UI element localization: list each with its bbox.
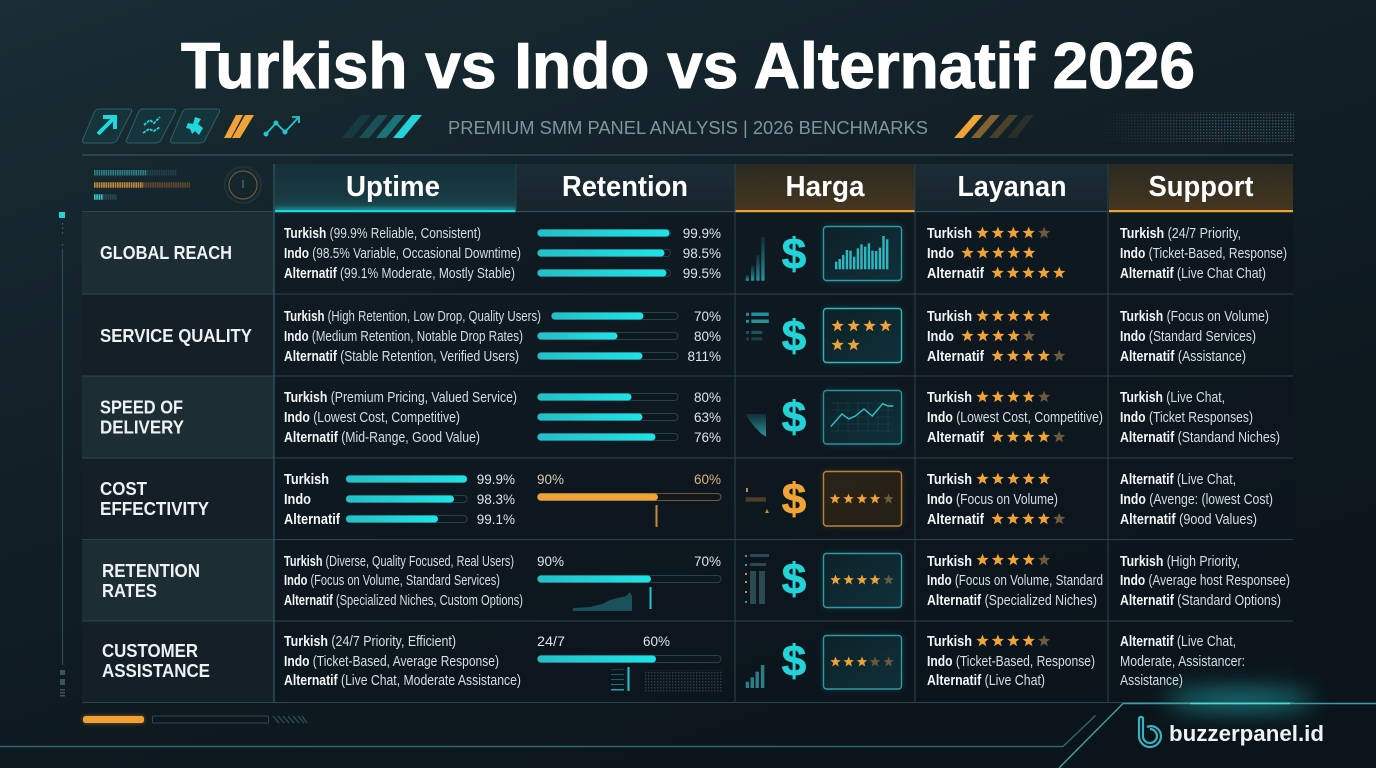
layanan ratings: Turkish [927, 226, 972, 242]
icon: orange slashes [954, 115, 1034, 138]
header: Support: Support [1148, 171, 1254, 203]
layanan ratings: Indo (Focus on Volume, Standard [927, 573, 1103, 589]
bottom status bars [83, 716, 307, 723]
uptime labels and bars: Alternatif [284, 512, 340, 528]
outlined track [152, 716, 268, 723]
row label line 2: RATES [102, 581, 157, 601]
layanan ratings: Indo (Ticket-Based, Response) [927, 654, 1095, 670]
row label: CUSTOMER [102, 641, 198, 661]
uptime text: Alternatif (Mid-Range, Good Value) [284, 430, 480, 446]
retention bars [538, 390, 721, 445]
uptime text: Turkish (Premium Pricing, Valued Service) [284, 390, 517, 406]
harga: icons and bar chart panel: $ [782, 230, 806, 279]
retention orange bar: 60% [694, 472, 721, 487]
uptime text: Indo (Ticket-Based, Average Response) [284, 654, 499, 670]
support text: Turkish (Live Chat, [1120, 390, 1225, 406]
status bars [94, 173, 190, 197]
layanan ratings: Alternatif [927, 349, 984, 365]
icon: arrow badge [82, 109, 132, 143]
support text: Alternatif (Standard Options) [1120, 593, 1281, 609]
support text: Turkish (Focus on Volume) [1120, 309, 1269, 325]
uptime text [284, 554, 523, 609]
uptime text: Turkish (24/7 Priority, Efficient) [284, 634, 456, 650]
retention bars: 99.9% [683, 226, 721, 241]
header: Layanan: Layanan [958, 171, 1066, 203]
support text: Alternatif (Live Chat, [1120, 634, 1236, 650]
uptime labels and bars [284, 472, 515, 528]
retention bar with dot matrix: 24/7 [537, 634, 565, 649]
header: Uptime: Uptime [346, 171, 440, 203]
retention bar with dot matrix [537, 634, 722, 692]
uptime text: Alternatif (Live Chat, Moderate Assistance) [284, 673, 521, 689]
row label: SPEED OF [100, 398, 183, 418]
uptime text: Turkish (High Retention, Low Drop, Quality Users) [284, 309, 541, 325]
layanan ratings: Turkish [927, 390, 972, 406]
icon row: top left icons [82, 109, 422, 143]
harga: icons and orange star panel [746, 472, 902, 526]
retention bar with mini chart: 70% [694, 554, 721, 569]
uptime text: Alternatif (99.1% Moderate, Mostly Stable) [284, 266, 515, 282]
row label line 2: ASSISTANCE [102, 661, 210, 681]
support text: Assistance) [1120, 673, 1183, 689]
harga: icons and line chart panel [745, 390, 902, 444]
uptime text: Alternatif (Specialized Niches, Custom Options) [284, 593, 523, 609]
row label: SERVICE QUALITY [100, 326, 252, 346]
support text: Turkish (24/7 Priority, [1120, 226, 1241, 242]
retention bars [538, 309, 721, 364]
row label: RETENTION [102, 561, 200, 581]
header: Layanan [916, 164, 1108, 212]
subtitle: PREMIUM SMM PANEL ANALYSIS | 2026 BENCHMARKS [448, 118, 928, 138]
retention bar with mini chart [537, 554, 721, 611]
title: Turkish vs Indo vs Alternatif 2026 [181, 29, 1195, 102]
layanan ratings: Indo (Focus on Volume) [927, 492, 1058, 508]
uptime text: Turkish (Diverse, Quality Focused, Real Users) [284, 554, 514, 570]
layanan ratings [927, 309, 1065, 365]
uptime labels and bars: 99.1% [477, 512, 515, 527]
layanan ratings: Turkish [927, 309, 972, 325]
retention orange bar: 90% [537, 472, 564, 487]
layanan ratings: Indo (Lowest Cost, Competitive) [927, 410, 1103, 426]
uptime text [284, 226, 521, 282]
retention bars: 811% [687, 349, 721, 364]
header: Uptime [275, 164, 516, 213]
retention bars: 70% [694, 309, 721, 324]
layanan ratings: Alternatif (Specialized Niches) [927, 593, 1097, 609]
row 2: Service Quality [100, 308, 1269, 365]
support text: Indo (Ticket Responses) [1120, 410, 1253, 426]
layanan ratings: Alternatif [927, 512, 984, 528]
harga: icons and orange star panel: $ [782, 475, 806, 524]
uptime labels and bars: 99.9% [477, 472, 515, 487]
retention bars [538, 226, 721, 281]
row 3: Speed of Delivery [100, 390, 1280, 446]
icon: orange double slash [224, 115, 254, 138]
layanan ratings: Alternatif (Live Chat) [927, 673, 1045, 689]
retention bars: 63% [694, 410, 721, 425]
footer lines and glow [0, 691, 1376, 768]
support text [1120, 226, 1287, 282]
icon: trend lines badge [126, 109, 176, 143]
support text [1120, 309, 1269, 365]
support text: Alternatif (Live Chat Chat) [1120, 266, 1266, 282]
support text [1120, 472, 1273, 528]
row label line 2: EFFECTIVITY [100, 499, 209, 519]
uptime text: Alternatif (Stable Retention, Verified Users) [284, 349, 519, 365]
support text: Alternatif (Standand Niches) [1120, 430, 1280, 446]
support text: Alternatif (Live Chat, [1120, 472, 1236, 488]
dot matrix decoration [1090, 112, 1294, 142]
layanan ratings [927, 390, 1103, 446]
support text: Indo (Ticket-Based, Response) [1120, 246, 1287, 262]
uptime text [284, 309, 541, 365]
icon: map badge [170, 109, 220, 143]
harga: icons and star panel [746, 308, 902, 362]
support text [1120, 634, 1245, 689]
left rail [59, 212, 65, 696]
uptime labels and bars: Turkish [284, 472, 329, 488]
layanan ratings [927, 554, 1103, 609]
row label: COST [100, 479, 147, 499]
harga: icons and star panel: $ [782, 312, 806, 361]
row 5: Retention Rates [102, 554, 1290, 611]
layanan ratings: Indo [927, 246, 954, 262]
harga: icons and star panel: $ [782, 637, 806, 686]
retention bars: 98.5% [683, 246, 721, 261]
row 4: Cost Effectivity [100, 472, 1273, 528]
uptime labels and bars: Indo [284, 492, 311, 508]
uptime text: Indo (Medium Retention, Notable Drop Rates) [284, 329, 523, 345]
logo: buzzerpanel.id [1139, 717, 1324, 747]
header: Retention [517, 164, 735, 212]
uptime text: Indo (Focus on Volume, Standard Services) [284, 573, 500, 589]
icon: logo mark [1139, 717, 1161, 747]
table header row [275, 164, 1293, 213]
support text: Indo (Standard Services) [1120, 329, 1256, 345]
header: Support [1109, 164, 1293, 213]
uptime labels and bars: 98.3% [477, 492, 515, 507]
icon: cyan slashes [342, 115, 422, 138]
row label line 2: DELIVERY [100, 418, 184, 438]
header: Harga: Harga [786, 171, 865, 203]
harga: icons and star panel [745, 554, 902, 608]
table body backgrounds [82, 212, 1293, 703]
layanan ratings: Alternatif [927, 430, 984, 446]
hatch marks [273, 716, 307, 723]
support text [1120, 554, 1290, 609]
layanan ratings [927, 634, 1095, 689]
harga: icons and bar chart panel [746, 226, 902, 281]
retention bars: 80% [694, 329, 721, 344]
harga: icons and line chart panel: $ [782, 393, 806, 442]
retention bar with mini chart: 90% [537, 554, 564, 569]
orange progress [83, 716, 144, 723]
layanan ratings [927, 472, 1065, 528]
layanan ratings: Turkish [927, 472, 972, 488]
layanan ratings [927, 226, 1065, 282]
retention bars: 76% [694, 430, 721, 445]
support text [1120, 390, 1280, 446]
support text: Moderate, Assistancer: [1120, 654, 1245, 670]
harga: icons and star panel [746, 636, 902, 689]
brand name: buzzerpanel.id [1169, 721, 1324, 746]
support text: Alternatif (Assistance) [1120, 349, 1246, 365]
uptime text: Indo (98.5% Variable, Occasional Downtime) [284, 246, 521, 262]
layanan ratings: Alternatif [927, 266, 984, 282]
support text: Indo (Average host Responsee) [1120, 573, 1290, 589]
uptime text [284, 634, 521, 689]
row label: GLOBAL REACH [100, 243, 232, 263]
uptime text [284, 390, 517, 446]
row 6: Customer Assistance [102, 634, 1245, 692]
retention orange bar [537, 472, 721, 527]
support text: Alternatif (9ood Values) [1120, 512, 1257, 528]
layanan ratings: Turkish [927, 554, 972, 570]
retention bars: 99.5% [683, 266, 721, 281]
retention bar with dot matrix: 60% [643, 634, 670, 649]
uptime text: Turkish (99.9% Reliable, Consistent) [284, 226, 481, 242]
panel: top left status cell [94, 167, 261, 203]
harga: icons and star panel: $ [782, 555, 806, 604]
layanan ratings: Turkish [927, 634, 972, 650]
uptime text: Indo (Lowest Cost, Competitive) [284, 410, 460, 426]
support text: Turkish (High Priority, [1120, 554, 1240, 570]
layanan ratings: Indo [927, 329, 954, 345]
header: Retention: Retention [562, 171, 688, 203]
row 1: Global Reach [100, 226, 1287, 282]
header: Harga [735, 164, 915, 213]
support text: Indo (Avenge: (lowest Cost) [1120, 492, 1273, 508]
retention bars: 80% [694, 390, 721, 405]
gauge [225, 167, 261, 203]
icon: line chart arrow [264, 117, 299, 136]
